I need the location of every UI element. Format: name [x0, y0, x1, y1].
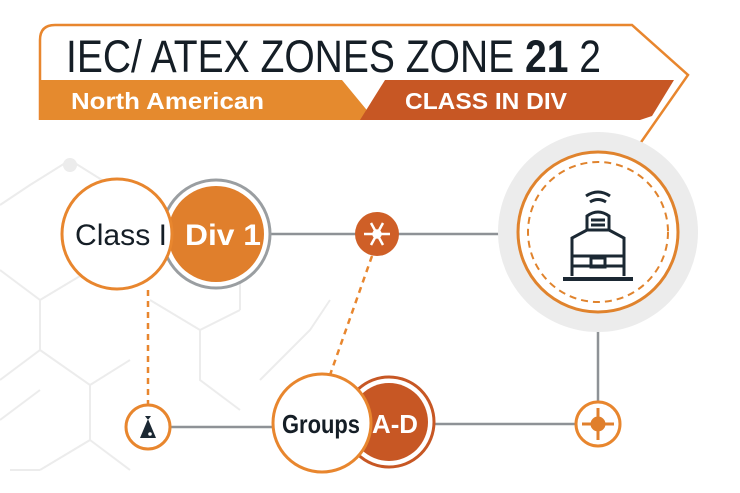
icon: crosshair node	[576, 402, 620, 446]
node: Groups A-D: A-D	[372, 409, 418, 439]
icon: snowflake node	[355, 212, 399, 256]
big circle: facility icon	[498, 132, 698, 332]
title: IEC/ ATEX ZONES ZONE 21 2	[66, 31, 601, 82]
subtitle right: CLASS IN DIV	[405, 88, 568, 114]
header	[40, 25, 688, 158]
node: Class I Div 1: Class I	[75, 219, 167, 252]
node: Class I Div 1	[62, 179, 270, 289]
icon: cone node	[126, 405, 170, 449]
connectors	[148, 234, 598, 427]
header band: north american	[40, 80, 375, 120]
node: Groups A-D	[273, 374, 434, 472]
header band: class in div	[360, 80, 674, 120]
node: Groups A-D: Groups	[282, 409, 360, 439]
subtitle left: North American	[71, 88, 264, 114]
node: Class I Div 1: Div 1	[185, 219, 261, 252]
background hex pattern	[0, 159, 330, 470]
